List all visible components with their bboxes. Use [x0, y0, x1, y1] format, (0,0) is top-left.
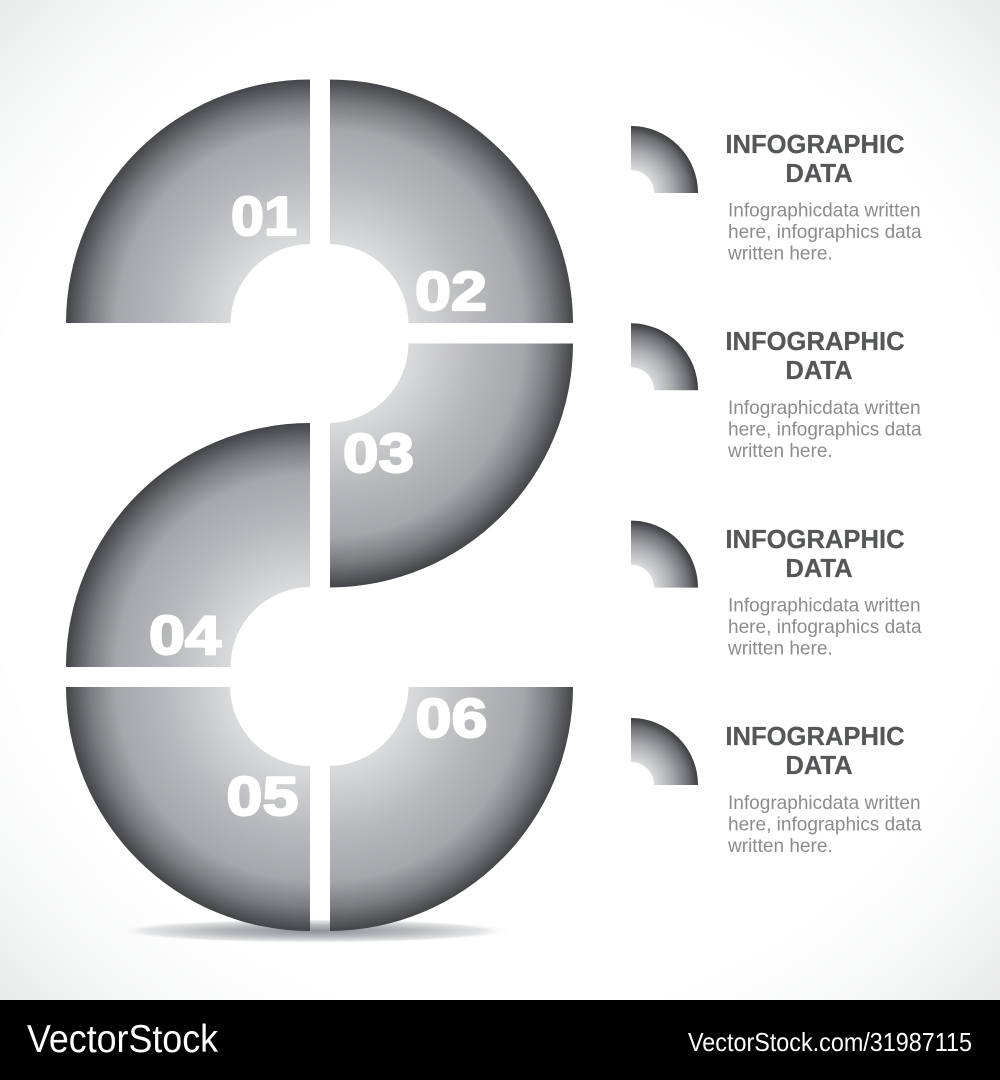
panel: segment 06: [330, 687, 573, 931]
icon: quarter ring 4: [631, 718, 698, 785]
number 01: 01: [231, 185, 297, 247]
text block 1: written here.: [727, 244, 833, 264]
heading 2: DATA: [785, 357, 853, 385]
text block 3: here, infographics data: [728, 617, 922, 638]
panel: segment 02: [330, 80, 573, 323]
heading 4: DATA: [785, 752, 853, 780]
heading 4: INFOGRAPHIC: [725, 723, 905, 751]
panel: legend item 4: [631, 718, 922, 857]
panel: segment 05: [66, 687, 310, 931]
text block 4: here, infographics data: [728, 814, 922, 836]
text block 3: written here.: [727, 638, 833, 660]
heading 2: INFOGRAPHIC: [725, 328, 905, 356]
number 03: 03: [343, 422, 414, 484]
text block 1: Infographicdata written: [728, 200, 921, 222]
icon: quarter ring 3: [631, 521, 698, 588]
heading 3: DATA: [785, 555, 853, 583]
text block 1: here, infographics data: [728, 222, 922, 243]
text block 4: written here.: [727, 836, 833, 857]
number 02: 02: [415, 260, 487, 322]
panel: segment 03: [330, 344, 573, 588]
heading 1: INFOGRAPHIC: [725, 131, 905, 159]
number 04: 04: [149, 604, 221, 666]
ground shadow: [114, 919, 514, 943]
panel: segment 04: [66, 423, 310, 667]
panel: legend item 1: [631, 126, 922, 264]
number 05: 05: [226, 765, 298, 827]
heading 1: DATA: [785, 160, 853, 188]
icon: quarter ring 2: [631, 323, 698, 390]
watermark logo: VectorStock: [27, 1018, 218, 1061]
icon: quarter ring 1: [631, 126, 698, 193]
number 06: 06: [416, 687, 488, 749]
text block 2: here, infographics data: [728, 420, 922, 440]
text block 3: Infographicdata written: [728, 596, 921, 616]
watermark bar: [0, 1000, 1000, 1080]
panel: legend item 3: [631, 521, 922, 660]
text block 2: Infographicdata written: [728, 398, 921, 419]
text block 4: Infographicdata written: [728, 793, 921, 814]
text block 2: written here.: [727, 441, 833, 462]
heading 3: INFOGRAPHIC: [725, 526, 905, 554]
panel: segment 01: [66, 79, 310, 323]
watermark url: VectorStock.com/31987115: [688, 1027, 972, 1057]
panel: legend item 2: [631, 323, 922, 462]
